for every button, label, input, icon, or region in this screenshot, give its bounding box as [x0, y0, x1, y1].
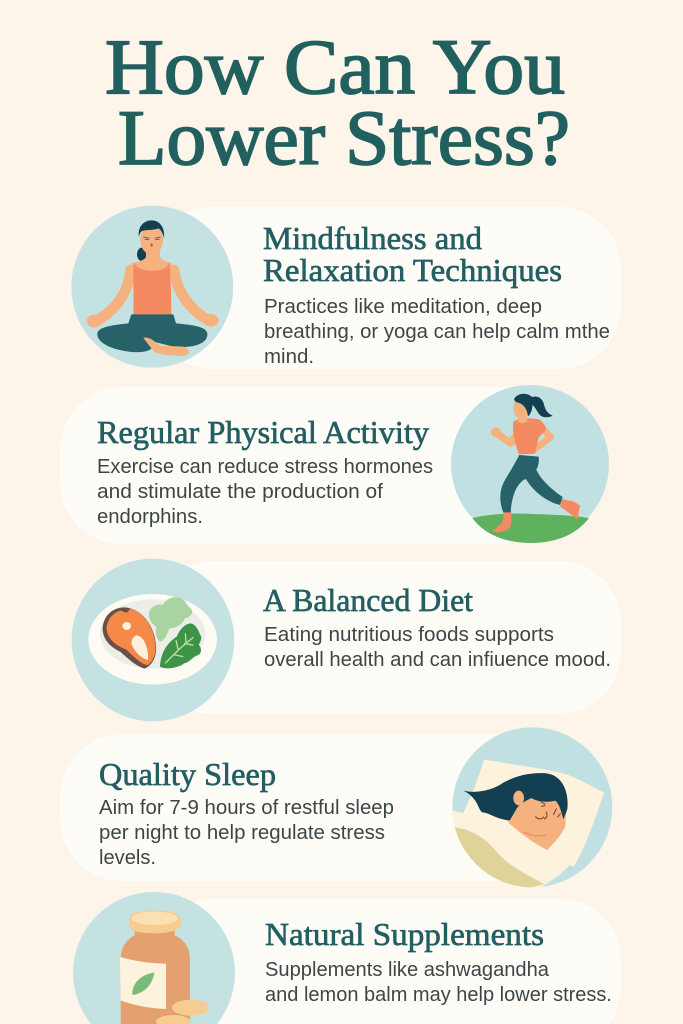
- body text: and stimulate the production of: [97, 481, 383, 503]
- body text: Eating nutritious foods supports: [264, 624, 554, 646]
- body text: overall health and can infiuence mood.: [264, 649, 611, 671]
- heading line 2: Relaxation Techniques: [263, 252, 562, 288]
- body text: breathing, or yoga can help calm mthe: [264, 321, 610, 343]
- body text: per night to help regulate stress: [99, 822, 385, 844]
- body text: Aim for 7-9 hours of restful sleep: [99, 797, 394, 819]
- panel: natural supplements: [73, 892, 621, 1024]
- panel: balanced diet: [72, 559, 621, 721]
- body text: [99, 797, 394, 869]
- body text: [264, 624, 611, 671]
- body text: Supplements like ashwagandha: [265, 959, 550, 981]
- icon: supplement bottle: [73, 892, 235, 1024]
- body text: [265, 959, 612, 1006]
- panel: mindfulness: [71, 206, 621, 369]
- body text: levels.: [99, 847, 156, 869]
- heading: A Balanced Diet: [263, 582, 473, 618]
- icon: meditation: [71, 206, 233, 368]
- body text: mind.: [264, 346, 314, 368]
- title: Lower Stress?: [118, 94, 570, 181]
- heading: Natural Supplements: [265, 916, 544, 952]
- heading: Regular Physical Activity: [97, 414, 429, 450]
- body text: [97, 456, 433, 528]
- body text: and lemon balm may help lower stress.: [265, 984, 612, 1006]
- body text: endorphins.: [97, 506, 203, 528]
- icon: runner: [451, 385, 609, 543]
- title: [105, 23, 570, 181]
- panel: quality sleep: [60, 727, 612, 889]
- heading: Mindfulness and: [263, 220, 482, 256]
- title: How Can You: [105, 23, 565, 110]
- body text: Exercise can reduce stress hormones: [97, 456, 433, 478]
- body text: Practices like meditation, deep: [264, 296, 542, 318]
- panel: physical activity: [60, 385, 609, 544]
- heading: Quality Sleep: [99, 756, 276, 792]
- body text: [264, 296, 610, 368]
- icon: plate of food: [72, 559, 234, 721]
- icon: sleeping woman: [450, 727, 612, 889]
